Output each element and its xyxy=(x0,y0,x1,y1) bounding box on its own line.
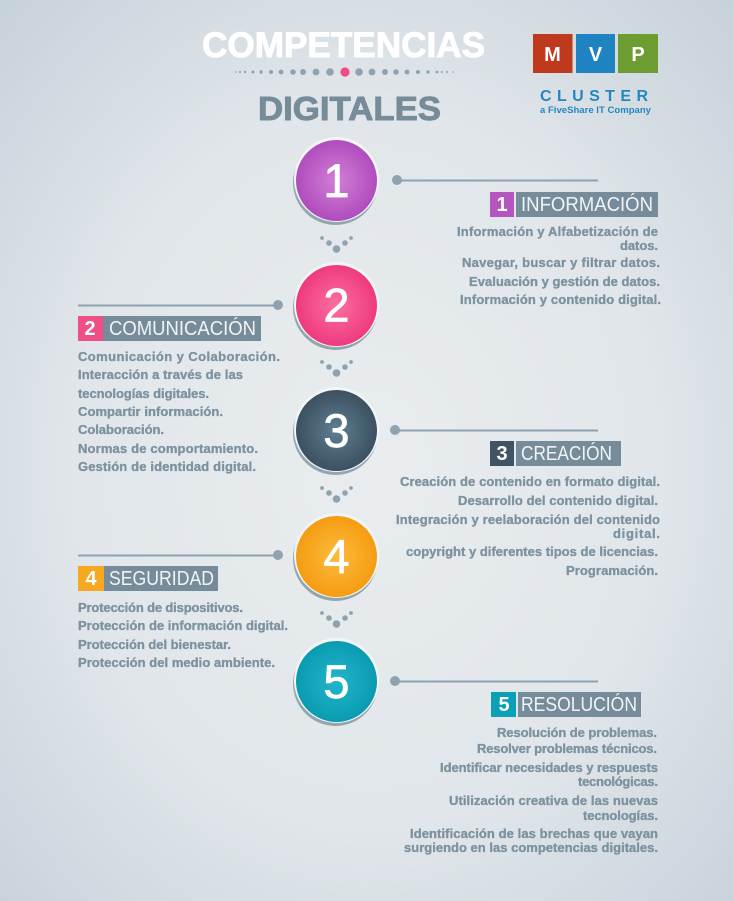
text: resolución items: tecnológicas. xyxy=(578,774,658,789)
panel: creación xyxy=(390,425,660,578)
text: comunicación items: Compartir información. xyxy=(78,404,223,419)
panel: información xyxy=(392,175,661,307)
logo: MVP Cluster: a FiveShare IT Company xyxy=(540,105,652,116)
text: comunicación items: Normas de comportamiento. xyxy=(78,441,258,456)
text: resolución items xyxy=(404,725,658,855)
leader line 4 xyxy=(78,550,283,560)
step circle 3 xyxy=(293,387,379,475)
heading: resolución: 5 xyxy=(498,694,510,716)
text: seguridad items: Protección de información digital. xyxy=(78,618,288,633)
text: comunicación items: Comunicación y Colaboración. xyxy=(78,349,280,364)
step circle 2 xyxy=(293,262,379,350)
text: seguridad items: Protección del bienestar. xyxy=(78,637,231,652)
leader line 3 xyxy=(390,425,598,435)
heading: seguridad xyxy=(78,566,218,591)
logo: MVP Cluster: CLUSTER xyxy=(540,88,648,105)
text: creación items: Integración y reelaboración del contenido xyxy=(396,512,660,527)
heading: información: 1 xyxy=(496,194,508,216)
step circle 5 xyxy=(293,638,379,726)
dots connector 3-4 xyxy=(320,486,353,503)
text: información items xyxy=(457,224,661,307)
text: comunicación items: tecnologías digitales. xyxy=(78,386,209,401)
step circle 3: 3 xyxy=(323,404,350,457)
leader line 1 xyxy=(392,175,598,185)
text: resolución items: Resolver problemas técnicos. xyxy=(477,741,657,756)
text: información items: Evaluación y gestión de datos. xyxy=(469,274,660,289)
text: comunicación items: Gestión de identidad digital. xyxy=(78,459,256,474)
title: competencias: COMPETENCIAS xyxy=(202,26,485,65)
text: creación items: Desarrollo del contenido digital. xyxy=(458,493,658,508)
heading: comunicación: 2 xyxy=(84,318,96,340)
heading: información: INFORMACIÓN xyxy=(521,193,653,216)
step circle 4: 4 xyxy=(323,530,350,583)
text: comunicación items xyxy=(78,349,280,474)
text: comunicación items: Interacción a través de las xyxy=(78,367,243,382)
heading: creación: CREACIÓN xyxy=(521,442,612,465)
text: creación items: digital. xyxy=(613,526,660,541)
text: seguridad items: Protección de dispositivos. xyxy=(78,600,243,615)
step circle 5: 5 xyxy=(323,655,350,708)
text: creación items: copyright y diferentes tipos de licencias. xyxy=(406,544,658,559)
step circle 4 xyxy=(293,513,379,601)
panel: comunicación xyxy=(78,300,283,474)
text: información items: Información y Alfabetización de xyxy=(457,224,658,239)
text: resolución items: surgiendo en las competencias digitales. xyxy=(404,840,658,855)
dots connector 4-5 xyxy=(320,611,353,628)
heading: resolución: RESOLUCIÓN xyxy=(521,693,637,716)
logo: MVP Cluster: P xyxy=(631,44,645,66)
logo: MVP Cluster: V xyxy=(589,44,603,66)
text: resolución items: Resolución de problemas. xyxy=(497,725,657,740)
leader line 2 xyxy=(78,300,283,310)
dots connector 2-3 xyxy=(320,360,353,377)
text: información items: datos. xyxy=(620,238,658,253)
text: creación items xyxy=(396,474,660,578)
logo: MVP Cluster: M xyxy=(544,44,561,66)
text: resolución items: Utilización creativa de las nuevas xyxy=(449,793,658,808)
logo: MVP Cluster xyxy=(533,34,658,116)
heading: información xyxy=(490,192,658,217)
leader line 5 xyxy=(390,676,598,686)
text: resolución items: Identificar necesidades y respuests xyxy=(440,760,658,775)
heading: seguridad: 4 xyxy=(85,568,97,590)
text: información items: Navegar, buscar y filtrar datos. xyxy=(462,255,660,270)
text: seguridad items xyxy=(78,600,288,670)
text: comunicación items: Colaboración. xyxy=(78,422,164,437)
text: seguridad items: Protección del medio ambiente. xyxy=(78,655,275,670)
dots connector 1-2 xyxy=(320,236,353,253)
step circle 1 xyxy=(293,137,379,225)
heading: resolución xyxy=(491,692,641,717)
step circle 1: 1 xyxy=(323,154,350,207)
panel: seguridad xyxy=(78,550,288,670)
heading: creación: 3 xyxy=(496,443,508,465)
text: creación items: Programación. xyxy=(566,563,658,578)
text: resolución items: tecnologías. xyxy=(583,808,658,823)
heading: seguridad: SEGURIDAD xyxy=(109,568,214,590)
dotted title divider xyxy=(235,67,454,77)
heading: comunicación: COMUNICACIÓN xyxy=(109,317,256,340)
step circle 2: 2 xyxy=(323,278,350,332)
title: digitales: DIGITALES xyxy=(258,90,441,127)
text: creación items: Creación de contenido en formato digital. xyxy=(400,474,660,489)
panel: resolución xyxy=(390,676,658,855)
text: resolución items: Identificación de las brechas que vayan xyxy=(410,826,658,841)
heading: creación xyxy=(490,441,621,466)
text: información items: Información y contenido digital. xyxy=(460,292,661,307)
